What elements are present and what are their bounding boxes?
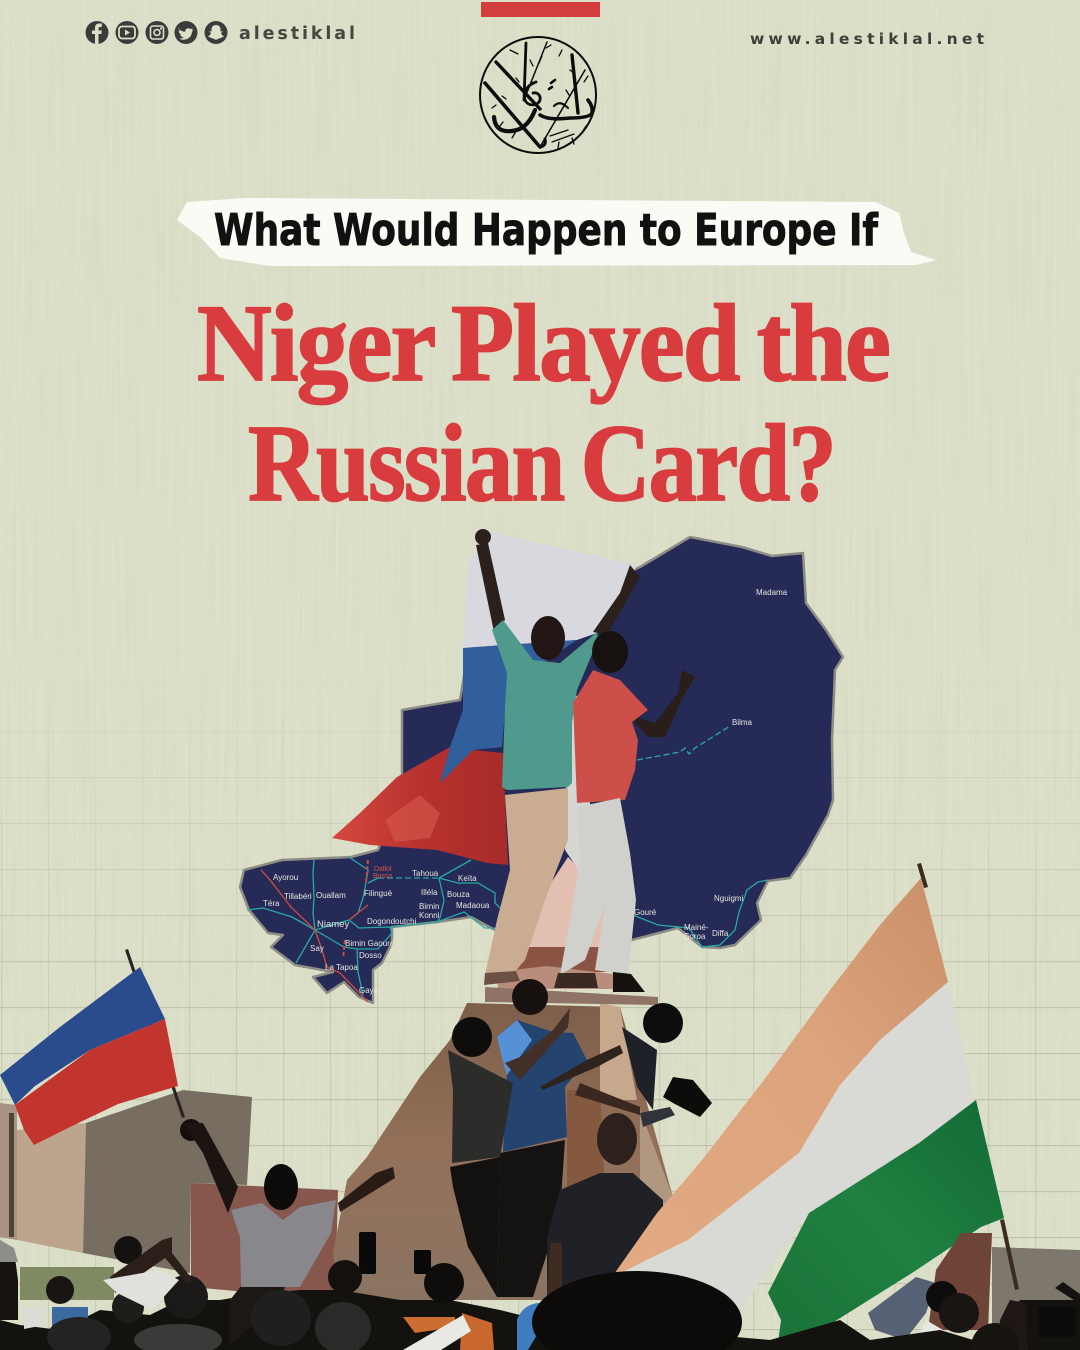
pedestal column [333,987,673,1300]
map place labels: Dallol [374,866,392,873]
main title [197,282,889,524]
big head of hair [532,1271,742,1350]
white stripe [612,982,975,1315]
map place labels: Say [310,944,324,953]
reaching arms [540,1045,623,1090]
icon: instagram [146,21,168,44]
main title: Niger Played the [197,282,889,404]
icon: youtube [116,21,138,44]
climber in blue shirt [497,979,587,1297]
map place labels: Madaoua [456,901,490,910]
russian flag held aloft [332,532,637,865]
map red roads [261,860,368,1002]
social icons row [86,21,228,44]
niger map [240,537,843,1003]
climber in grey-black shirt [448,1017,513,1297]
raised hand of the crowd [230,1250,295,1345]
niger flag, right [612,863,1004,1350]
map place labels: Bosso [373,873,393,880]
map place labels: Illéla [421,888,438,897]
paper background [0,685,1080,1338]
icon: facebook [86,21,108,44]
map place labels: Dosso [359,951,382,960]
camera [663,1077,712,1117]
main title: Russian Card? [248,402,835,524]
top red tab [481,2,600,17]
building wall at left [0,1090,338,1300]
map place labels [263,588,788,995]
map place labels: Bilma [732,718,753,727]
icon: snapchat [204,21,228,44]
map place labels: Ouallam [316,891,346,900]
heads and helmets [328,1260,362,1294]
crowd at the bottom [0,1232,1080,1350]
map place labels: Gouré [634,908,657,917]
map place labels: Bouza [447,890,470,899]
man raising arm [180,1119,395,1287]
map place labels: Niamey [317,919,349,930]
man in red shirt, right figure [554,631,695,992]
map place labels: Madama [756,588,788,597]
orange stripe [612,878,948,1277]
phones raised [359,1232,376,1274]
map place labels: Nguigmi [714,894,744,903]
map place labels: Diffa [712,929,729,938]
climbers on the pedestal [448,979,712,1297]
map place labels: Tahoua [412,869,439,878]
handle: alestiklal: alestiklal [239,24,355,44]
subtitle brush highlight [177,198,936,266]
map place labels: Téra [263,899,280,908]
flag pole [917,863,928,888]
icon: twitter [174,21,198,44]
map place labels: Mainé- [684,923,709,932]
green stripe [768,1100,1004,1350]
logo: calligraphic roundel [480,37,596,153]
man in black shirt with glasses [547,1113,663,1297]
climber at right with camera [622,1003,683,1127]
hills and containers at right [868,1219,1080,1350]
bright clothing [403,1317,455,1333]
map place labels: Tillabéri [284,892,312,901]
pink pedestal block and light gap [497,690,618,989]
hands at the flag pole [998,1300,1028,1350]
map place labels: Soroa [684,932,706,941]
map place labels: Keïta [458,874,477,883]
map place labels: Filingué [364,889,393,898]
website url: www.alestiklal.net [750,30,985,48]
map place labels: Konni [419,911,440,920]
second man in white shirt [103,1236,193,1310]
man in teal shirt, left figure [475,529,640,985]
map place labels: Birnin Gaouré [345,939,395,948]
subtitle: What Would Happen to Europe If [214,205,879,256]
map place labels: La Tapoa [325,963,358,972]
map place labels: Birnin [419,902,439,911]
map place labels: Gaya [359,986,379,995]
map place labels: Ayorou [273,873,298,882]
map place labels: Dogondoutchi [367,917,417,926]
map routes [247,726,768,995]
russian-style waving flag, left [0,949,185,1145]
